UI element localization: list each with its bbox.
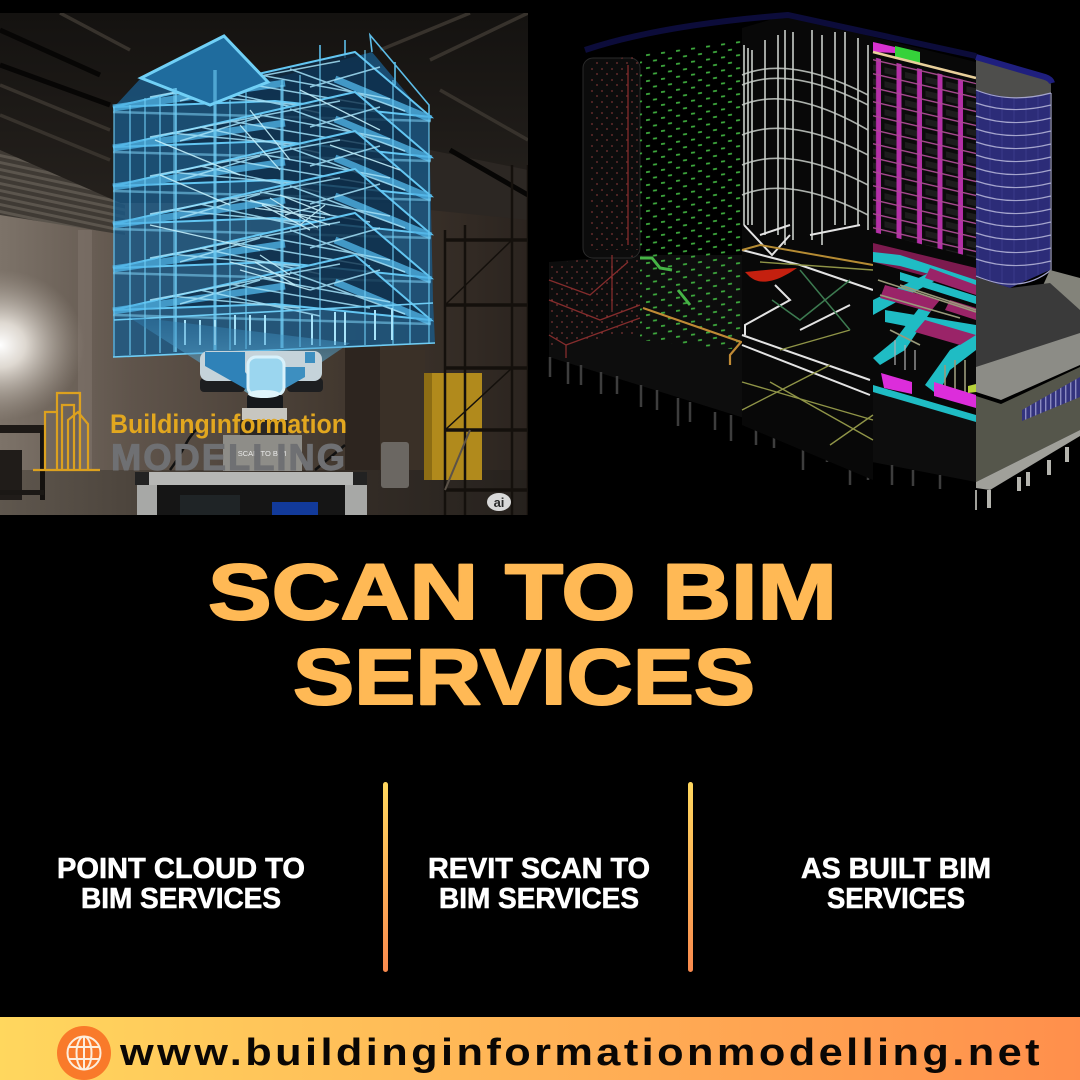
divider 2	[688, 782, 693, 972]
section: green point cloud	[640, 38, 742, 365]
service: point cloud to BIM	[57, 853, 305, 915]
hologram verticals	[113, 50, 435, 357]
section: coloured MEP services	[873, 37, 976, 422]
warehouse floor	[0, 470, 528, 515]
divider 1	[383, 782, 388, 972]
scanner device	[200, 351, 323, 471]
service: point cloud to BIM: BIM SERVICES	[81, 883, 281, 915]
support piles	[550, 357, 940, 489]
title	[208, 547, 837, 721]
service: as built BIM: AS BUILT BIM	[801, 853, 991, 885]
cart at left	[0, 425, 45, 500]
logo icon	[33, 393, 100, 470]
watermark logo	[33, 393, 347, 478]
icon: globe	[57, 1026, 111, 1080]
service: as built BIM: SERVICES	[827, 883, 965, 915]
section: white wireframe	[742, 14, 873, 480]
website url: www.buildinginformationmodelling.net	[119, 1032, 1043, 1074]
barrel	[381, 442, 409, 488]
logo subtitle: MODELLING	[111, 437, 347, 478]
service: Revit scan to BIM: BIM SERVICES	[439, 883, 639, 915]
bright central detail	[150, 90, 400, 290]
service: Revit scan to BIM	[428, 853, 650, 915]
service: point cloud to BIM: POINT CLOUD TO	[57, 853, 305, 885]
roof railing	[320, 35, 429, 120]
service: Revit scan to BIM: REVIT SCAN TO	[428, 853, 650, 885]
section: solid podium	[976, 270, 1080, 510]
upper roof slab	[141, 36, 268, 105]
scaffolding	[445, 165, 528, 515]
base plinth shadow	[549, 240, 976, 482]
scanner projection cone	[127, 316, 350, 396]
ai badge	[487, 493, 511, 511]
wall columns and shadows	[78, 230, 380, 470]
ai badge: ai	[494, 495, 504, 510]
warehouse wall	[0, 203, 527, 470]
service: as built BIM	[801, 853, 991, 915]
title line 1: SCAN TO BIM	[208, 547, 837, 636]
title line 2: SERVICES	[293, 632, 755, 721]
hologram building	[113, 35, 435, 357]
scanner device: SCAN TO BIM	[238, 449, 286, 458]
section: solid building tower	[976, 57, 1052, 288]
equipment table	[135, 428, 367, 515]
panel: AI hologram scan photo	[0, 13, 528, 515]
panel: BIM building cutaway model	[549, 14, 1080, 510]
section: sparse red point cloud	[549, 55, 640, 358]
footer bar	[0, 1017, 1080, 1080]
yellow cabinet	[424, 373, 482, 480]
logo wordmark: Buildinginformation	[110, 409, 347, 439]
light glow	[0, 278, 78, 412]
roof band	[585, 15, 976, 56]
warehouse ceiling	[0, 13, 528, 235]
